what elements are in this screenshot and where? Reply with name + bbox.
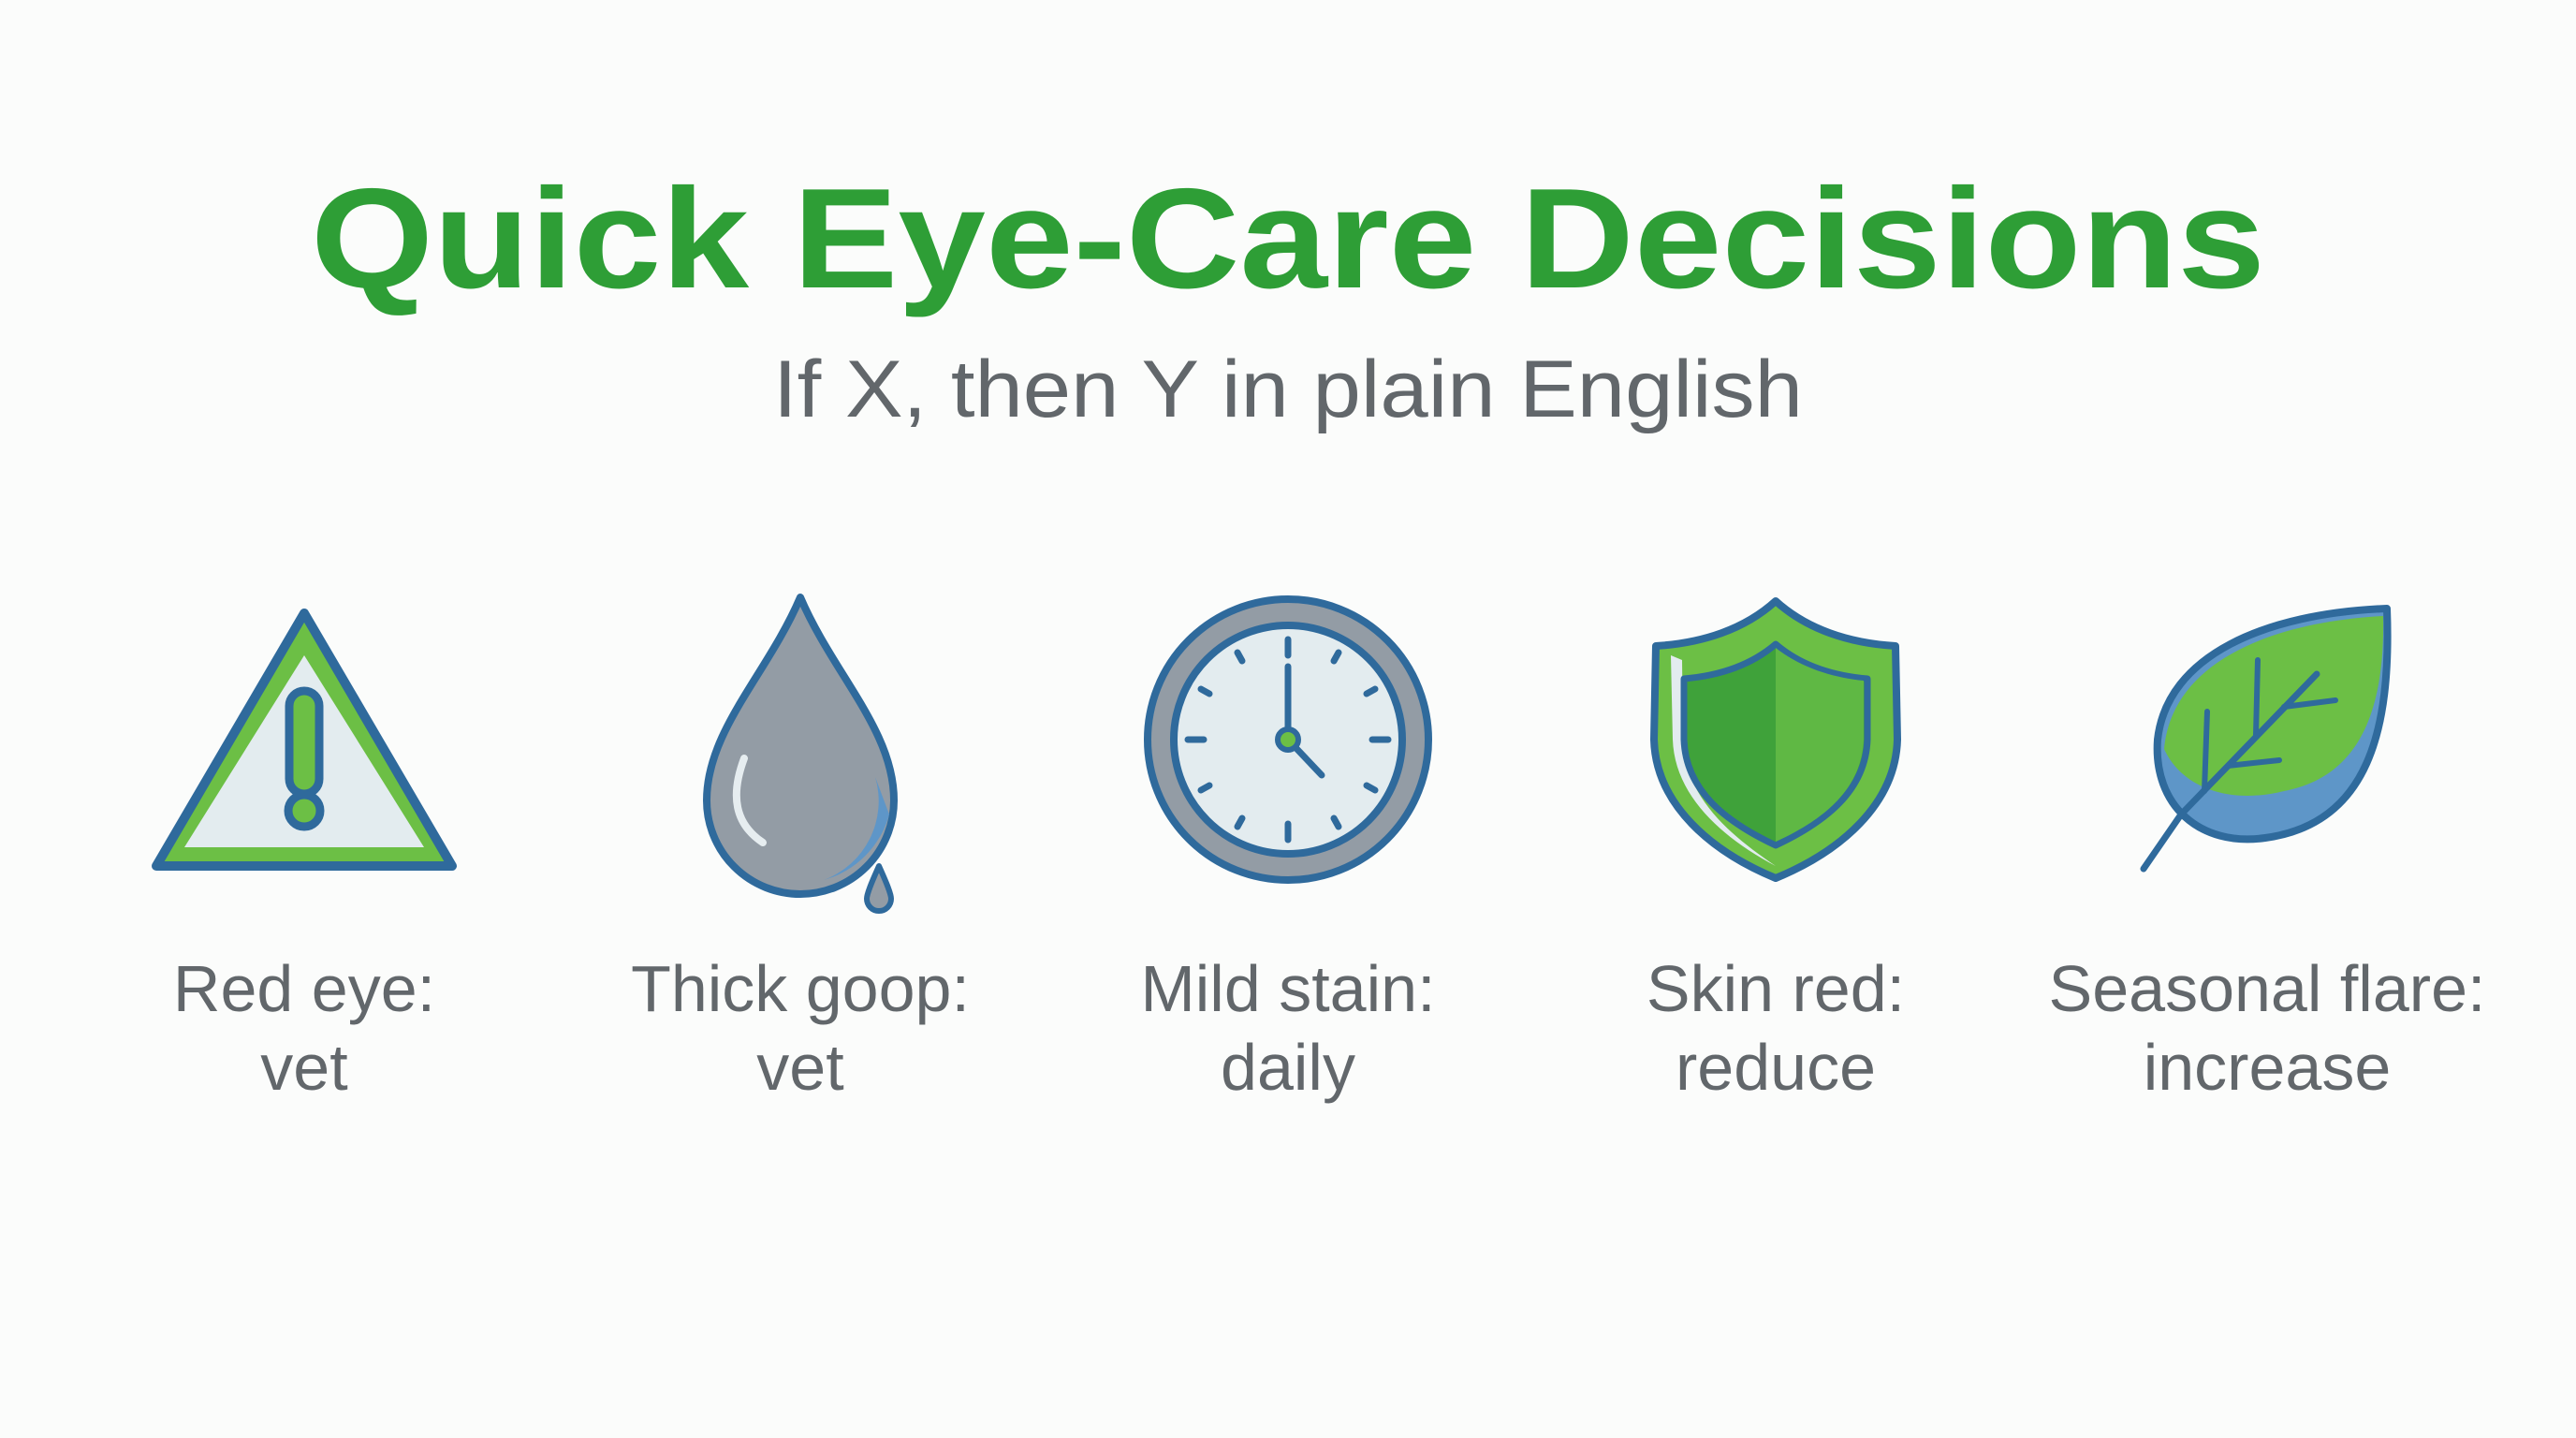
label: thick goop: vet xyxy=(756,1031,844,1104)
icon: drop xyxy=(707,597,894,911)
icon: clock xyxy=(1148,599,1428,880)
label: thick goop: Thick goop: xyxy=(631,952,970,1025)
label: skin red: Skin red: xyxy=(1647,952,1905,1025)
title: Quick Eye-Care Decisions xyxy=(311,159,2265,318)
label: mild stain: daily xyxy=(1221,1031,1355,1104)
label: red eye: vet xyxy=(260,1031,348,1104)
icon: shield xyxy=(1654,601,1897,878)
subtitle: If X, then Y in plain English xyxy=(773,345,1803,434)
label: seasonal flare: Seasonal flare: xyxy=(2049,952,2485,1025)
icon: leaf xyxy=(2144,609,2388,869)
label: red eye: Red eye: xyxy=(173,952,435,1025)
icon: warning triangle xyxy=(156,613,452,866)
label: seasonal flare: increase xyxy=(2144,1031,2391,1104)
label: skin red: reduce xyxy=(1676,1031,1876,1104)
label: mild stain: Mild stain: xyxy=(1140,952,1436,1025)
